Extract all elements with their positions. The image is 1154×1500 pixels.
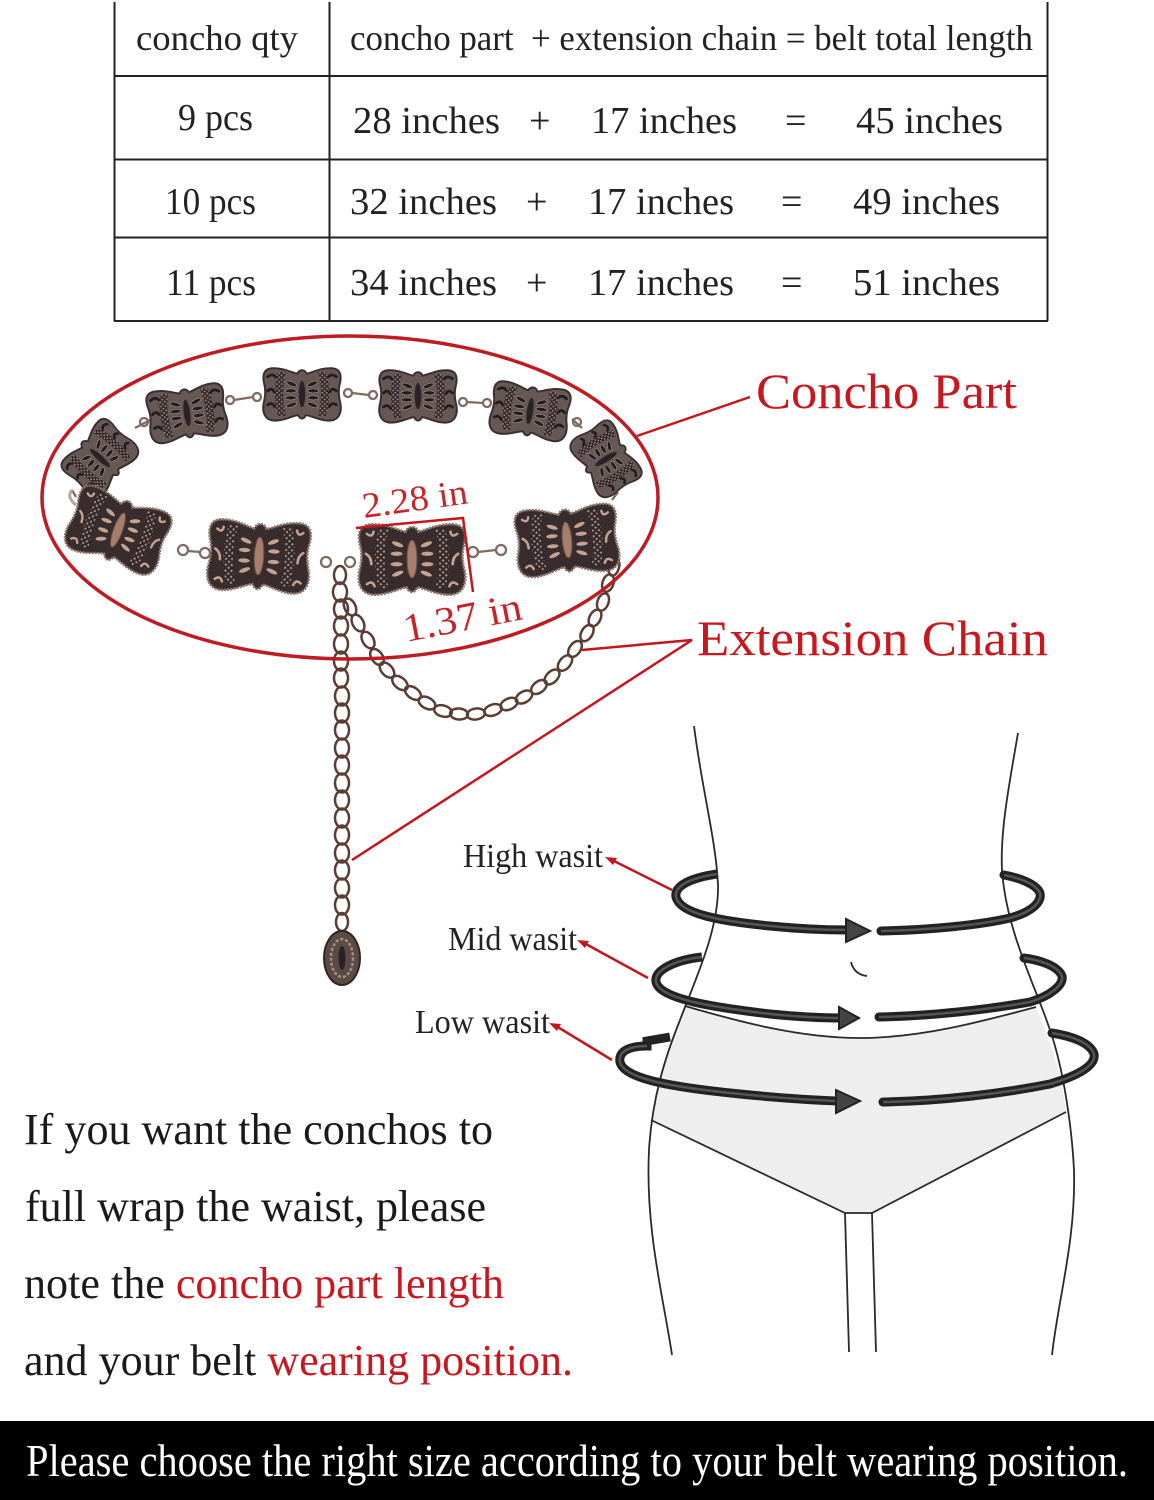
table row: 11 pcs: 34 inches	[350, 262, 497, 304]
table row: 10 pcs: 49 inches	[853, 181, 1000, 223]
table row: 10 pcs: 32 inches	[350, 181, 497, 223]
note text: If you want the conchos to	[24, 1105, 493, 1154]
draped chain	[341, 557, 621, 721]
label: high waist: High wasit	[463, 838, 604, 875]
body outlines	[648, 726, 1074, 1355]
table row: 11 pcs: +	[526, 262, 547, 304]
callout: extension chain	[352, 610, 1048, 860]
dimension: width 2.28 in	[356, 472, 473, 592]
callout: concho part: Concho Part	[756, 363, 1017, 419]
table row: 9 pcs: 28 inches	[353, 100, 500, 142]
belt photo	[58, 368, 645, 985]
table row: 10 pcs: =	[781, 181, 802, 223]
dimension: height 1.37 in: 1.37 in	[399, 584, 526, 651]
label: mid waist	[448, 921, 648, 978]
table row: 10 pcs: 10 pcs	[165, 181, 256, 223]
table row: 10 pcs	[165, 181, 1000, 223]
label: low waist: Low wasit	[415, 1004, 551, 1041]
table row: 9 pcs: +	[529, 100, 550, 142]
note text: note the concho part length	[24, 1259, 504, 1308]
note text	[24, 1105, 573, 1385]
table row: 11 pcs: 11 pcs	[166, 262, 256, 304]
red ellipse: concho part outline	[42, 336, 658, 659]
size table	[114, 2, 1048, 321]
label: low waist	[415, 1004, 612, 1060]
table row: 11 pcs: =	[781, 262, 802, 304]
hanging chain	[333, 566, 349, 931]
underwear shading	[652, 1006, 1066, 1213]
front conchos	[61, 482, 175, 579]
ring: mid waist	[656, 957, 1062, 1029]
ring: low waist	[620, 1033, 1094, 1113]
callout: extension chain: Extension Chain	[697, 610, 1048, 666]
dimension: width 2.28 in: 2.28 in	[360, 472, 470, 526]
label: mid waist: Mid wasit	[448, 921, 578, 958]
table row: 11 pcs: 51 inches	[853, 262, 1000, 304]
table row: 9 pcs: 17 inches	[591, 100, 737, 142]
note text: and your belt wearing position.	[24, 1336, 573, 1385]
back conchos	[145, 382, 229, 445]
table row: 9 pcs	[178, 97, 1003, 142]
table header row: concho part + extension chain = belt total length	[350, 18, 1033, 58]
table row: 10 pcs: +	[526, 181, 547, 223]
table row: 9 pcs: 9 pcs	[178, 97, 253, 139]
table row: 11 pcs: 17 inches	[588, 262, 734, 304]
label: high waist	[463, 838, 672, 890]
table row: 11 pcs	[166, 262, 1000, 304]
callout: concho part	[637, 363, 1017, 436]
table row: 9 pcs: 45 inches	[856, 100, 1003, 142]
body diagram	[620, 726, 1094, 1355]
pendant	[324, 931, 360, 985]
connector links	[70, 389, 618, 567]
footer banner	[0, 1421, 1154, 1500]
ring: high waist	[676, 874, 1040, 942]
table header row: concho qty	[136, 18, 298, 58]
table row: 9 pcs: =	[785, 100, 806, 142]
table row: 10 pcs: 17 inches	[588, 181, 734, 223]
note text: full wrap the waist, please	[25, 1182, 486, 1231]
